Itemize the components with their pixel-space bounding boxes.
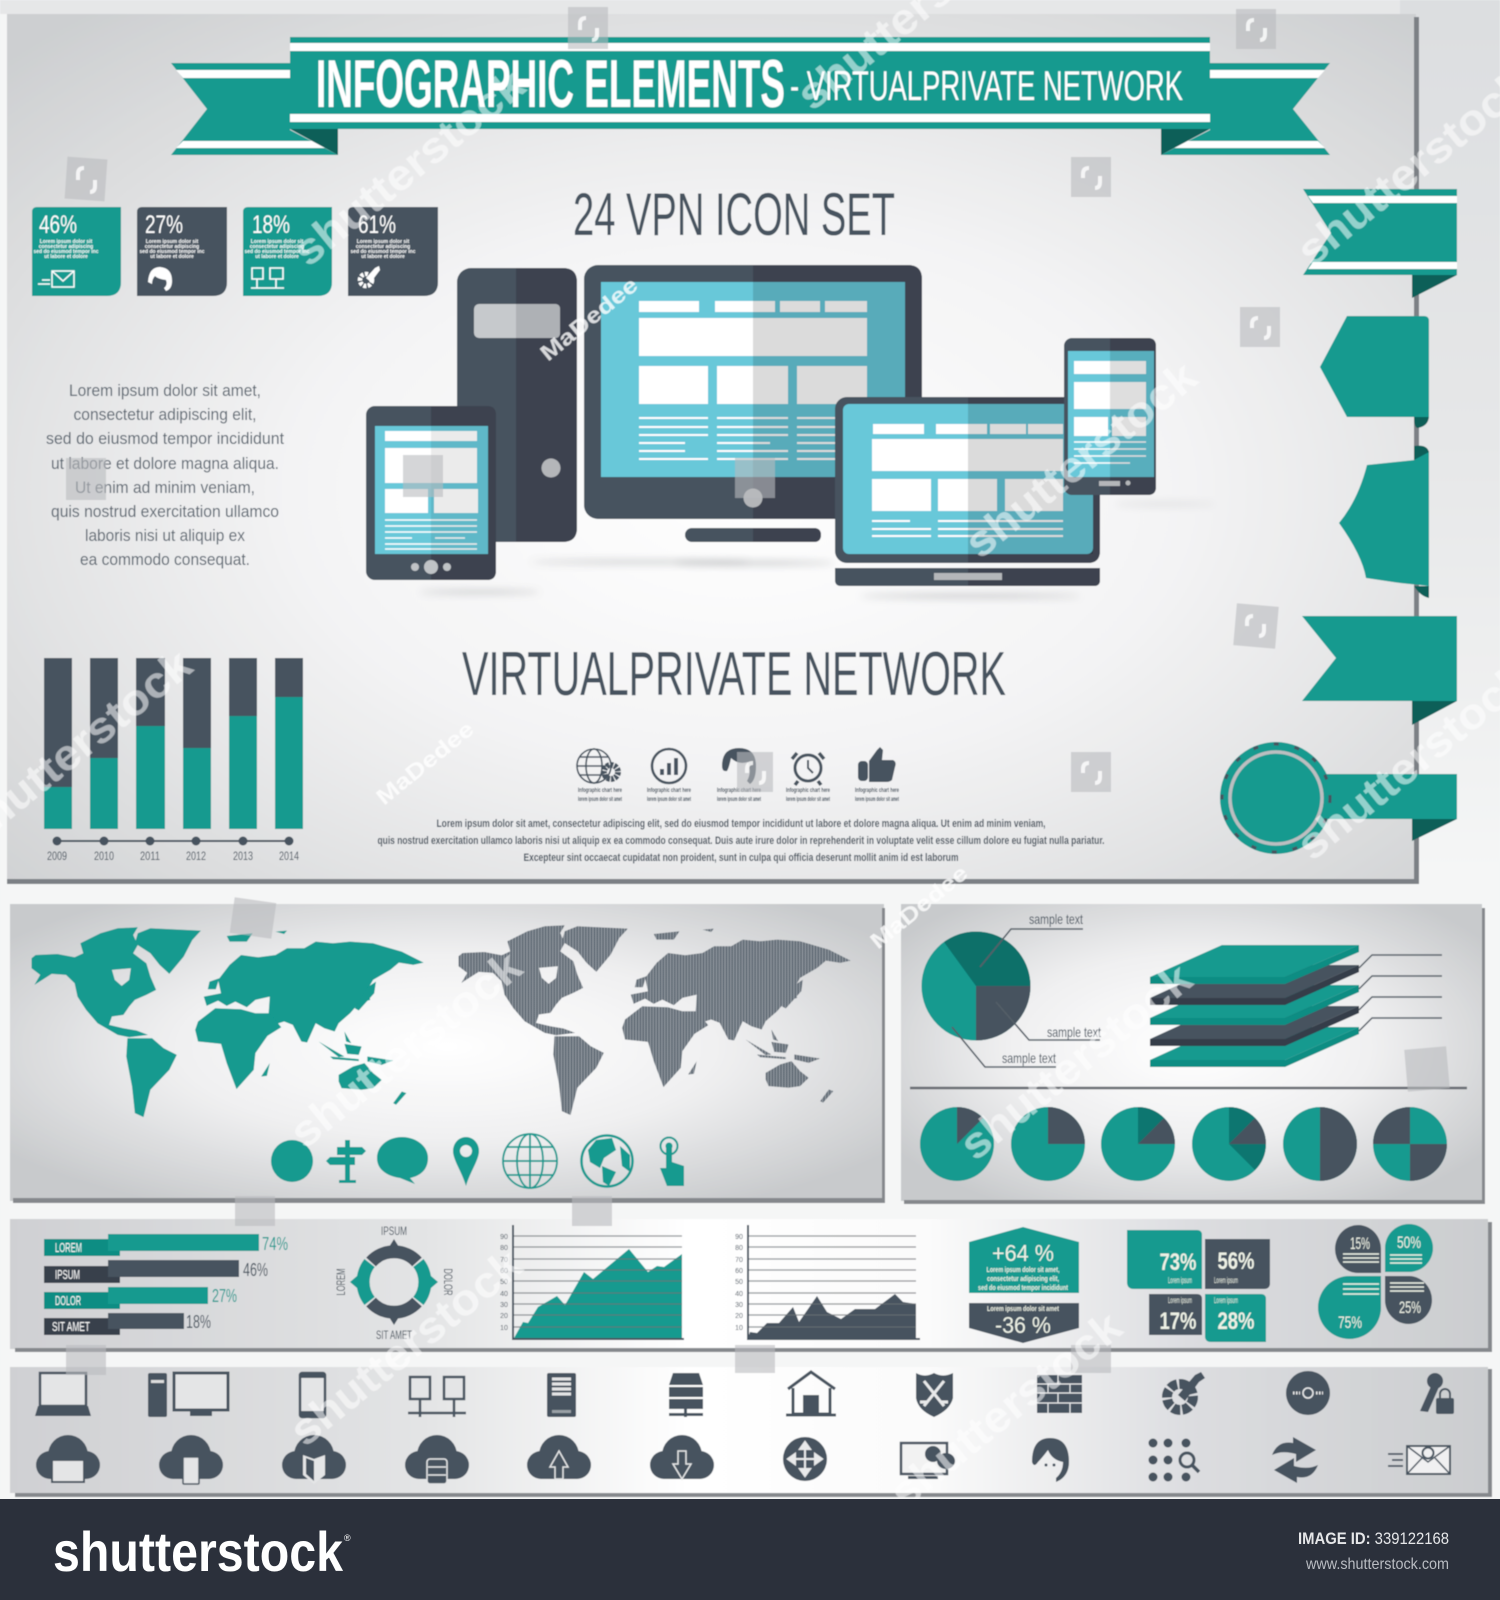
area chart teal: 70 [500,1257,508,1264]
icon: cloud phone [159,1435,223,1484]
petal stats diagram [1318,1224,1433,1339]
hexagon stats card: Lorem ipsum dolor sit amet [987,1304,1059,1313]
stat card 61%: Lorem ipsum dolor sit [357,239,410,245]
icon captions: lorem ipsum dolor sit amet [786,796,830,803]
quad stat tiles: Lorem ipsum [1214,1276,1238,1285]
large pie chart with callouts: sample text [1029,911,1083,927]
bar row dolor: 27% [212,1286,237,1306]
area chart grey: 50 [735,1279,743,1286]
icon captions: lorem ipsum dolor sit amet [717,796,761,803]
icon: cloud shield [282,1435,346,1484]
intro text block: ea commodo consequat. [80,550,250,569]
area chart teal: 40 [500,1291,508,1298]
icon captions: lorem ipsum dolor sit amet [647,796,691,803]
ring diagram: LOREM [334,1268,348,1296]
intro text block: quis nostrud exercitation ullamco [51,502,279,521]
ribbon flag: notched [1302,616,1457,725]
watermark text: shutterstock: shutterstock [950,953,1202,1170]
icon captions: lorem ipsum dolor sit amet [855,796,899,803]
banner title text: INFOGRAPHIC ELEMENTS [316,46,785,122]
footer image id: IMAGE ID: 339122168 [1298,1529,1449,1548]
bar row sit amet: SIT AMET [52,1319,90,1334]
icon: brick firewall [1037,1375,1082,1413]
area chart grey: 10 [735,1325,743,1332]
icon: dots with magnifier [1148,1438,1199,1482]
icon: cloud upload [527,1435,591,1479]
watermark text: shutterstock: shutterstock [880,1301,1132,1518]
icon captions: Infographic chart here [578,787,622,794]
stat card 46%: Lorem ipsum dolor sit [40,239,93,245]
bar row dolor [44,1286,237,1309]
area chart teal: 60 [500,1268,508,1275]
icon: map pin [453,1137,479,1186]
quad stat tiles: 56% [1218,1248,1254,1275]
paragraph text: quis nostrud exercitation ullamco laboris nisi ut aliquip ex ea commodo consequat. Duis aute irure dolor in reprehenderit in voluptate velit esse cillum dolore eu fugiat nulla pariatur. [378,835,1104,847]
stacked layers diagram [1150,945,1442,1067]
stat card 46%: sed do eiusmod tempor inc [33,249,99,255]
ring diagram: DOLOR [441,1268,455,1296]
watermark text: MaDedee: MaDedee [535,272,643,366]
icon: cloud database [405,1435,469,1484]
paragraph text: Excepteur sint occaecat cupidatat non proident, sunt in culpa qui officia deserunt mollit anim id est laborum [524,852,959,864]
stat card 18%: Lorem ipsum dolor sit [251,239,304,245]
icon: globe with gear [577,749,618,783]
icon: network [408,1377,466,1417]
stat card 61%: consectetur adipiscing [356,244,410,250]
layer 3 [1150,985,1359,1025]
bar row sit amet: 18% [186,1312,211,1332]
icon: sync arrows [1272,1437,1318,1483]
icon: monitor chat [901,1443,955,1479]
icon: support agent [1032,1438,1069,1482]
bar row lorem: 74% [262,1234,288,1254]
panel: main VPN overview [7,14,1457,884]
large pie chart with callouts: sample text [1047,1024,1101,1040]
panel: icon set strip [10,1367,1492,1497]
laptop [835,397,1100,586]
heading: virtual private network: VIRTUALPRIVATE NETWORK [462,640,1006,709]
watermark text: shutterstock: shutterstock [280,1239,532,1456]
layer 1 [1150,945,1359,984]
year timeline: 2009 [47,849,67,863]
feature icon row [577,747,899,803]
pie 1 [920,1107,994,1181]
icon captions: Infographic chart here [717,787,761,794]
watermark text: MaDedee [371,272,973,954]
area chart grey: 30 [735,1302,743,1309]
area chart grey: 40 [735,1291,743,1298]
stat card 27%: Lorem ipsum dolor sit [146,239,199,245]
petal stats diagram: 25% [1399,1298,1421,1317]
stat card 61%: ut labore et dolore [361,254,405,260]
ring diagram: SIT AMET [376,1328,412,1342]
icon: smartphone [300,1373,325,1417]
round badge with ribbon [1220,742,1457,854]
bar row lorem [44,1234,288,1256]
area chart teal: 10 [500,1325,508,1332]
tablet [366,406,496,580]
year timeline: 2014 [279,849,299,863]
icon: laptop [35,1373,91,1416]
banner subtitle text: - VIRTUALPRIVATE NETWORK [790,62,1183,109]
stat card 18%: 18% [252,211,290,239]
icon captions: lorem ipsum dolor sit amet [578,796,622,803]
device illustration group [366,265,1215,598]
area chart grey: 20 [735,1313,743,1320]
horizontal bars chart [44,1234,288,1335]
panel: world maps [10,904,885,1203]
quad stat tiles: Lorem ipsum [1214,1296,1238,1305]
map: dotted grey world map [459,925,851,1115]
quad stat tiles [1127,1230,1270,1342]
ring diagram: IPSUM [381,1224,407,1238]
bar row ipsum [44,1260,268,1283]
stacked bar chart [44,658,303,863]
icon: server tower [547,1373,576,1417]
stat card 61%: 61% [358,211,396,239]
watermark text: shutterstock: shutterstock [955,351,1207,568]
petal stats diagram: 75% [1338,1313,1362,1332]
area chart grey [735,1225,920,1339]
petal stats diagram: 50% [1397,1233,1421,1252]
bookmark ribbon: striped [1303,189,1457,298]
pie row [920,1107,1447,1181]
intro text block: Lorem ipsum dolor sit amet, [69,381,261,400]
hexagon stats card: consectetur adipiscing elit, [987,1274,1059,1283]
layer 5 [1150,1027,1359,1067]
heading: 24 VPN icon set: 24 VPN ICON SET [573,181,895,248]
panel: pies and layers [901,904,1485,1204]
intro text block: laboris nisi ut aliquip ex [85,526,245,545]
icon captions: Infographic chart here [786,787,830,794]
paragraph text: Lorem ipsum dolor sit amet, consectetur adipiscing elit, sed do eiusmod tempor incididunt ut labore et dolore magna aliqua. Ut enim ad minim veniam, [436,818,1046,830]
icon: cloud download [650,1435,714,1479]
intro text block: ut labore et dolore magna aliqua. [51,454,279,473]
pie 4 [1192,1107,1266,1181]
hexagon stats card [969,1227,1079,1343]
area chart grey: 60 [735,1268,743,1275]
icon: key and lock [1420,1373,1454,1414]
paragraph text [378,818,1104,864]
icon: speech bubble [377,1137,428,1184]
ribbon tag: curved [1339,446,1429,598]
pie 3 [1101,1107,1175,1181]
bar row lorem: LOREM [55,1240,82,1255]
pie 6 [1373,1107,1447,1181]
map: solid teal world map [32,927,424,1117]
icon: wire globe [503,1134,557,1188]
icon: thumbs up [858,747,896,782]
quad stat tiles: Lorem ipsum [1168,1296,1192,1305]
panel: charts strip [10,1219,1492,1352]
desktop monitor [584,265,922,542]
stat card 61%: sed do eiusmod tempor inc [350,249,416,255]
icon: email [1388,1446,1450,1474]
icon: server stack [669,1373,703,1417]
ring diagram [334,1224,455,1342]
year timeline: 2011 [140,849,160,863]
icon: desktop and tower [148,1373,228,1417]
stat card 27%: consectetur adipiscing [145,244,199,250]
footer bar [0,1499,1500,1600]
intro text block: consectetur adipiscing elit, [74,405,256,424]
icon: touch hand [660,1138,684,1186]
footer registered mark: ® [344,1533,351,1543]
stat card 27% [137,207,227,296]
bar row ipsum: IPSUM [55,1267,80,1282]
bar row dolor: DOLOR [55,1293,81,1308]
icon captions: Infographic chart here [647,787,691,794]
phone [1064,338,1156,495]
stat card 46%: consectetur adipiscing [39,244,93,250]
icon: disc [1286,1371,1330,1415]
icon: move arrows [783,1437,827,1481]
area chart grey: 70 [735,1257,743,1264]
petal stats diagram: 15% [1350,1234,1370,1253]
area chart grey: 90 [735,1234,743,1241]
watermark square logos [65,7,1450,1375]
intro text block [46,381,284,569]
year timeline: 2010 [94,849,114,863]
icon: gear and wrench [1167,1372,1205,1410]
footer logo: shutterstock [53,1520,344,1583]
icon: home [786,1372,836,1415]
stat card 46%: 46% [39,211,77,239]
icon captions: Infographic chart here [855,787,899,794]
icon: signpost [326,1140,366,1183]
quad stat tiles: 17% [1160,1308,1196,1335]
icon captions [578,787,899,803]
icon: alarm clock [792,753,824,785]
stat card 18%: sed do eiusmod tempor inc [244,249,310,255]
stat card 27%: ut labore et dolore [150,254,194,260]
watermark text: MaDedee: MaDedee [865,860,973,954]
title banner ribbon [171,37,1330,155]
area chart teal: 90 [500,1234,508,1241]
stat card 27%: sed do eiusmod tempor inc [139,249,205,255]
area chart teal: 30 [500,1302,508,1309]
intro text block: Ut enim ad minim veniam, [75,478,255,497]
stat cards row [32,207,438,296]
year timeline: 2013 [233,849,253,863]
layer 4 [1150,1006,1359,1046]
area chart teal: 20 [500,1313,508,1320]
stat card 18% [243,207,332,296]
icon: shield with swords [916,1373,953,1417]
watermark text: shutterstock: shutterstock [283,59,535,276]
ribbon tag: hexagonal [1320,316,1429,428]
quad stat tiles: 73% [1160,1249,1196,1276]
area chart teal: 50 [500,1279,508,1286]
layer 2 [1150,965,1359,1005]
footer url: www.shutterstock.com [1305,1556,1449,1573]
area chart teal: 80 [500,1245,508,1252]
large pie chart with callouts: sample text [1002,1050,1056,1066]
hexagon stats card: Lorem ipsum dolor sit amet, [986,1265,1060,1274]
icon: chart circle [652,749,686,783]
stat card 27%: 27% [145,211,183,239]
pie 2 [1011,1107,1085,1181]
stat card 46% [32,207,121,296]
area chart grey: 80 [735,1245,743,1252]
bar row ipsum: 46% [243,1260,268,1280]
watermark text: MaDedee: MaDedee [371,716,479,810]
year timeline [47,836,299,863]
pie 5 [1283,1107,1357,1181]
year timeline: 2012 [186,849,206,863]
icon: earth globe [582,1136,632,1186]
icon: cloud monitor [36,1435,100,1482]
area chart teal [500,1225,684,1339]
icon: map blob speech [271,1140,313,1182]
stat card 18%: consectetur adipiscing [250,244,304,250]
stat card 61% [348,207,438,296]
watermark text: shutterstock: shutterstock [280,941,532,1158]
tower computer [457,268,577,542]
large pie chart with callouts [922,911,1101,1067]
hexagon stats card: -36 % [995,1312,1051,1338]
quad stat tiles: 28% [1218,1308,1254,1335]
icon: support headset [722,748,756,784]
hexagon stats card: sed do eiusmod tempor incididunt [978,1283,1068,1292]
bar row sit amet [44,1312,211,1335]
stat card 18%: ut labore et dolore [255,254,299,260]
intro text block: sed do eiusmod tempor incididunt [46,429,284,448]
stat card 46%: ut labore et dolore [44,254,88,260]
hexagon stats card: +64 % [992,1240,1054,1266]
quad stat tiles: Lorem ipsum [1168,1276,1192,1285]
